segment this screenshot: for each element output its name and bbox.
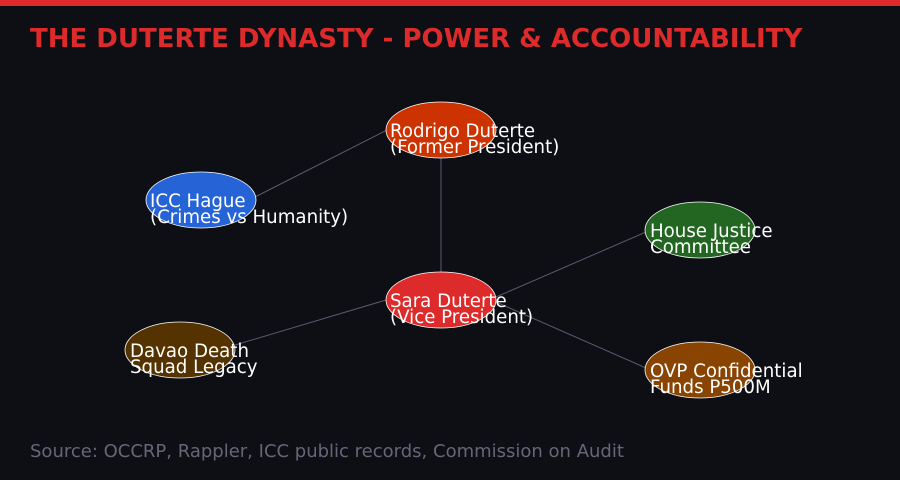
node: Sara Duterte: Sara Duterte	[390, 291, 507, 312]
node: Rodrigo Duterte	[386, 102, 559, 158]
node: ICC Hague: ICC Hague	[150, 191, 246, 212]
node: Rodrigo Duterte: (Former President)	[390, 137, 559, 158]
node: Sara Duterte	[386, 272, 533, 328]
node: Davao Death Squad: Squad Legacy	[130, 357, 258, 378]
node: Rodrigo Duterte: Rodrigo Duterte	[390, 121, 535, 142]
title: THE DUTERTE DYNASTY - POWER & ACCOUNTABILITY	[30, 24, 803, 54]
node: House Justice Committee: Committee	[650, 237, 751, 258]
node: ICC Hague	[146, 172, 348, 228]
node: OVP Confidential Funds	[645, 342, 803, 398]
node: OVP Confidential Funds: OVP Confidential	[650, 361, 803, 382]
node: OVP Confidential Funds: Funds P500M	[650, 377, 771, 398]
edges	[235, 130, 646, 368]
node: Davao Death Squad	[125, 322, 258, 378]
source: Source: OCCRP, Rappler, ICC public records, Commission on Audit	[30, 441, 624, 462]
node: House Justice Committee	[645, 202, 773, 258]
node: House Justice Committee: House Justice	[650, 221, 773, 242]
top accent bar	[0, 0, 900, 6]
node: ICC Hague: (Crimes vs Humanity)	[150, 207, 348, 228]
node: Sara Duterte: (Vice President)	[390, 307, 533, 328]
node: Davao Death Squad: Davao Death	[130, 341, 249, 362]
